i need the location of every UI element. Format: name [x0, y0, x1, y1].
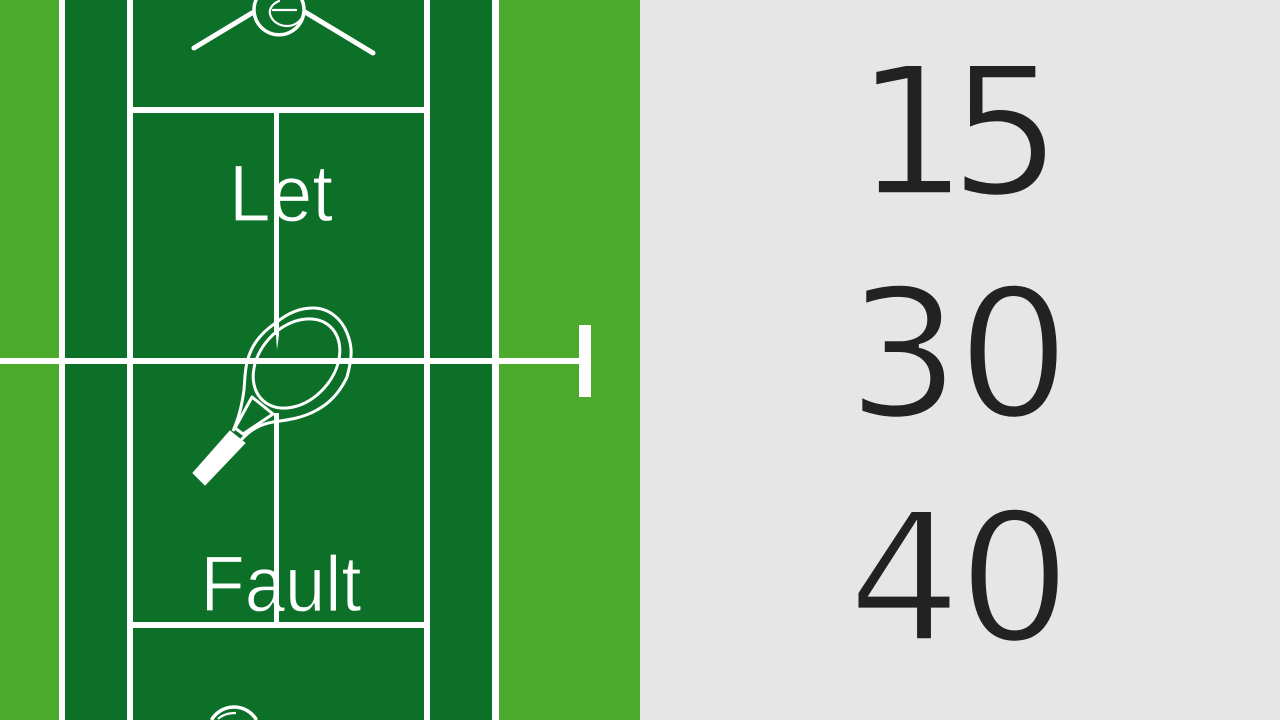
score: 40: 40 [848, 475, 1071, 682]
label: Fault: Fault [200, 539, 362, 628]
panel: score background [640, 0, 1280, 720]
court lines [0, 0, 580, 720]
score: 30: 30 [847, 251, 1070, 458]
net post [579, 325, 591, 397]
label: Let: Let [229, 149, 333, 239]
icon: bottom tennis ball [212, 707, 256, 720]
panel: tennis court surface [0, 0, 640, 720]
score: 15: 15 [855, 29, 1062, 236]
icon: tennis racket [193, 302, 357, 485]
icon: top tennis ball with strokes [194, 0, 373, 53]
